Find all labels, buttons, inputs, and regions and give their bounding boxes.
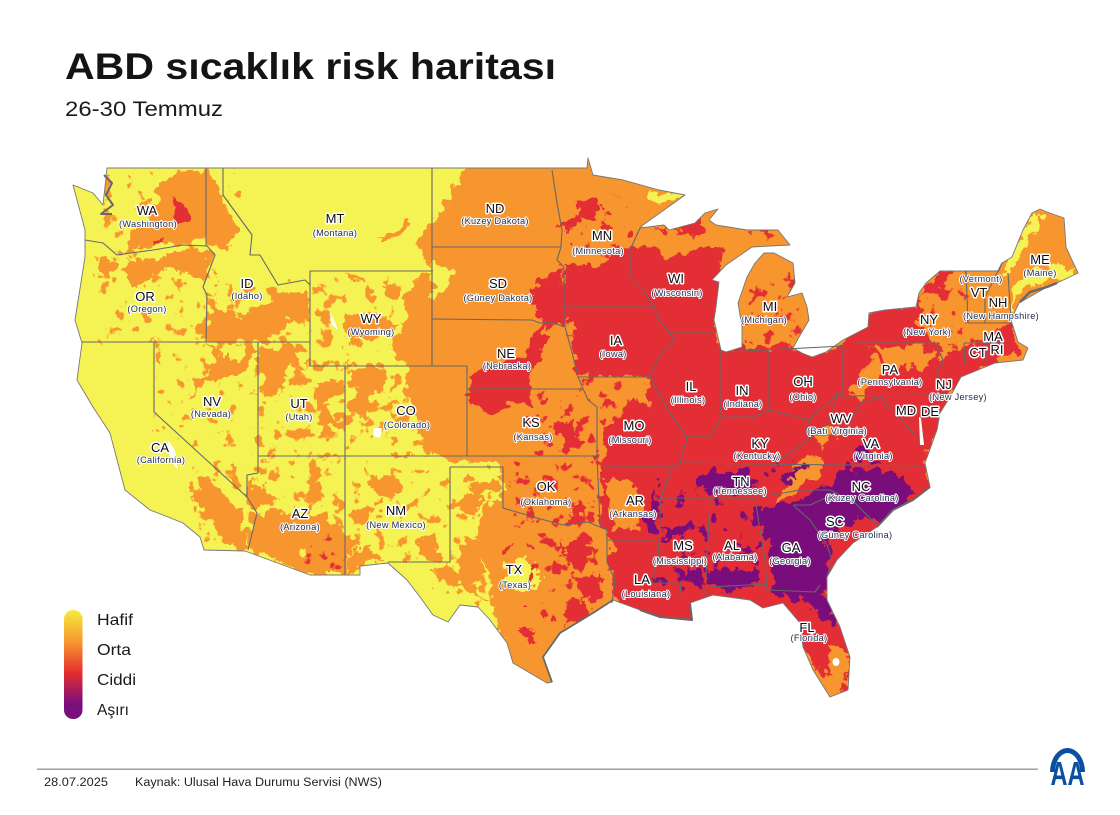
state labels: (Alabama) [712, 552, 758, 562]
state labels: (Arizona) [280, 522, 320, 532]
state labels: RI [990, 342, 1004, 357]
state labels: (New York) [903, 327, 951, 337]
heat risk map of the United States [60, 150, 1100, 710]
state labels: MO [624, 418, 644, 433]
state labels: (Utah) [285, 412, 313, 422]
state labels: NJ [936, 377, 952, 392]
state borders [73, 158, 1078, 697]
footer rule [37, 768, 1038, 770]
state labels: (Georgia) [769, 556, 811, 566]
state labels: KS [522, 415, 540, 430]
state labels: (Wisconsin) [651, 288, 703, 298]
state labels: (Virginia) [853, 451, 893, 461]
state labels: KY [751, 436, 769, 451]
state labels: OH [793, 374, 813, 389]
state labels: (Kuzey Carolina) [825, 493, 899, 503]
state labels: (Kuzey Dakota) [461, 216, 529, 226]
legend labels [97, 612, 136, 719]
state labels: (Oregon) [127, 304, 167, 314]
state labels: WY [361, 311, 382, 326]
state labels: NY [920, 312, 938, 327]
state labels: WA [137, 203, 158, 218]
state labels: (Florida) [791, 633, 827, 643]
state labels: (California) [137, 455, 185, 465]
state labels: (New Hampshire) [963, 311, 1039, 321]
state labels: TX [506, 562, 523, 577]
state labels: MT [326, 211, 344, 226]
agency logo: AA [1050, 755, 1084, 792]
state labels: VT [971, 285, 987, 300]
legend labels: Aşırı [97, 702, 129, 719]
state labels: (Arkansas) [609, 509, 657, 519]
state labels: TN [732, 474, 750, 489]
state labels: (Maine) [1023, 268, 1057, 278]
state labels: ID [240, 276, 254, 291]
legend labels: Ciddi [97, 672, 136, 689]
state labels: UT [290, 396, 308, 411]
state labels: (Ohio) [789, 392, 817, 402]
state labels: (Minnesota) [572, 246, 624, 256]
state labels: (Missouri) [608, 435, 652, 445]
state labels: FL [799, 620, 815, 635]
state labels: AL [724, 538, 740, 553]
state labels: (Vermont) [959, 274, 1003, 284]
state labels: IN [736, 383, 748, 398]
state labels: MN [592, 228, 612, 243]
footer source: Kaynak: Ulusal Hava Durumu Servisi (NWS) [135, 777, 382, 789]
state labels: NE [497, 346, 515, 361]
state labels: (Indiana) [724, 399, 762, 409]
state labels: ND [486, 201, 504, 216]
state labels: SC [826, 514, 844, 529]
state labels: NM [386, 503, 406, 518]
legend [64, 610, 136, 719]
state labels: (Oklahoma) [520, 497, 572, 507]
state labels [119, 201, 1057, 643]
state labels: MD [896, 403, 916, 418]
state labels: (Michigan) [741, 315, 787, 325]
subtitle: 26-30 Temmuz [65, 98, 223, 121]
state labels: (Güney Dakota) [463, 293, 533, 303]
state labels: (Mississippi) [653, 556, 707, 566]
lakes, bays and no-data patches [168, 312, 930, 666]
title: ABD sıcaklık risk haritası [65, 46, 556, 87]
state labels: CT [969, 345, 987, 360]
state labels: (Wyoming) [347, 327, 395, 337]
state labels: MI [763, 299, 777, 314]
state labels: (Kentucky) [734, 451, 780, 461]
state labels: (Louisiana) [622, 589, 670, 599]
state labels: (Washington) [119, 219, 177, 229]
state labels: (Batı Virginia) [807, 426, 867, 436]
state labels: (Illinois) [671, 395, 705, 405]
state labels: PA [882, 362, 899, 377]
state labels: DE [921, 404, 939, 419]
agency logo [1050, 748, 1085, 792]
state labels: GA [782, 540, 801, 555]
state labels: MA [983, 329, 1003, 344]
state labels: (Tennessee) [713, 486, 767, 496]
state labels: SD [489, 276, 507, 291]
state labels: (Güney Carolina) [818, 530, 892, 540]
darker coast details [101, 175, 113, 214]
state labels: (New Jersey) [929, 392, 987, 402]
footer date: 28.07.2025 [44, 777, 108, 789]
state labels: VA [863, 436, 880, 451]
state labels: (Iowa) [599, 349, 627, 359]
state labels: NV [203, 394, 221, 409]
state labels: MS [673, 538, 693, 553]
state labels: (Idaho) [231, 291, 263, 301]
legend colour bar [64, 610, 82, 719]
state labels: (Pennsylvania) [858, 377, 922, 387]
state labels: WI [668, 271, 684, 286]
state labels: (Colorado) [384, 420, 430, 430]
state labels: (Nebraska) [483, 361, 531, 371]
state labels: (Texas) [499, 580, 531, 590]
state labels: CA [151, 440, 169, 455]
state labels: NC [852, 479, 870, 494]
state labels: OR [135, 289, 155, 304]
state labels: (New Mexico) [366, 520, 426, 530]
state labels: IA [610, 333, 622, 348]
legend labels: Orta [97, 642, 131, 659]
state labels: OK [537, 479, 556, 494]
state labels: CO [396, 403, 416, 418]
state labels: ME [1030, 252, 1050, 267]
state labels: AR [626, 493, 644, 508]
state labels: NH [989, 295, 1007, 310]
state labels: (Kansas) [513, 432, 553, 442]
state labels: (Nevada) [191, 409, 231, 419]
state labels: IL [686, 379, 696, 394]
state labels: AZ [292, 506, 308, 521]
state labels: LA [634, 572, 650, 587]
legend labels: Hafif [97, 612, 134, 629]
state labels: (Montana) [313, 228, 357, 238]
state labels: WV [831, 411, 852, 426]
